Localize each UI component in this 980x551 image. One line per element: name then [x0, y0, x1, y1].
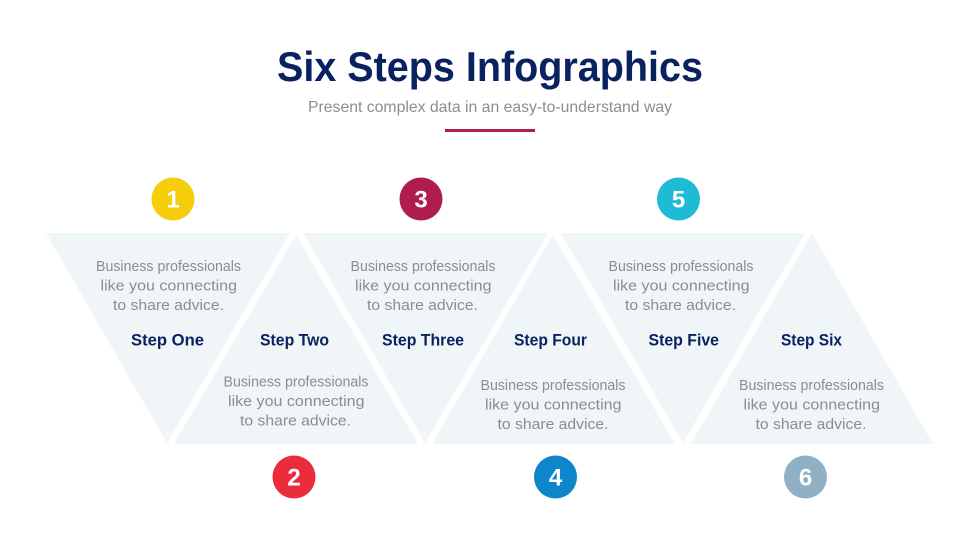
panel: step six: like you connecting: [744, 398, 880, 414]
badge: number 3: [400, 178, 442, 220]
panel: step one: to share advice.: [113, 298, 224, 314]
badge: number 2: [272, 456, 316, 498]
panel: step three: Step Three: [382, 330, 464, 350]
panel: step five: Business professionals: [608, 259, 754, 275]
badge: number 6: [784, 456, 827, 498]
panel: step six: [691, 233, 933, 444]
title: Six Steps Infographics: [277, 43, 703, 90]
badge: number 6: 6: [799, 464, 812, 492]
panel: step four: to share advice.: [498, 417, 608, 433]
badge: number 4: [534, 456, 577, 498]
panel: step three: [303, 233, 548, 443]
panel: step two: to share advice.: [240, 414, 351, 430]
subtitle: Present complex data in an easy-to-understand way: [308, 99, 672, 116]
panel: step two: like you connecting: [228, 394, 364, 410]
panel: step one: [46, 233, 290, 443]
panel: step five: Step Five: [648, 330, 719, 350]
panel: step four: Step Four: [514, 330, 587, 350]
panel: step two: Business professionals: [224, 374, 368, 390]
panel: step four: Business professionals: [480, 378, 626, 394]
panel: step one: like you connecting: [100, 278, 237, 294]
panel: step four: like you connecting: [485, 398, 622, 414]
panel: step four: [432, 235, 675, 444]
badge: number 1: 1: [166, 186, 180, 214]
panel: step six: Business professionals: [739, 378, 884, 394]
badge: number 5: [657, 178, 700, 220]
panel: step two: Step Two: [260, 330, 329, 350]
badge: number 4: 4: [549, 464, 563, 492]
badge: number 5: 5: [672, 186, 685, 214]
panel: step one: Step One: [131, 330, 204, 350]
title underline: [445, 129, 535, 132]
panel: step two: [174, 235, 418, 444]
badge: number 2: 2: [287, 464, 301, 492]
panel: step six: to share advice.: [756, 417, 866, 433]
badge: number 1: [152, 178, 194, 220]
panel: step one: Business professionals: [96, 259, 241, 275]
panel: step five: to share advice.: [625, 298, 736, 314]
badge: number 3: 3: [414, 186, 428, 214]
panel: step three: Business professionals: [350, 259, 496, 275]
panel: step six: Step Six: [781, 330, 842, 350]
panel: step five: [561, 233, 805, 443]
panel: step three: like you connecting: [355, 278, 492, 294]
panel: step five: like you connecting: [613, 278, 750, 294]
panel: step three: to share advice.: [367, 298, 478, 314]
